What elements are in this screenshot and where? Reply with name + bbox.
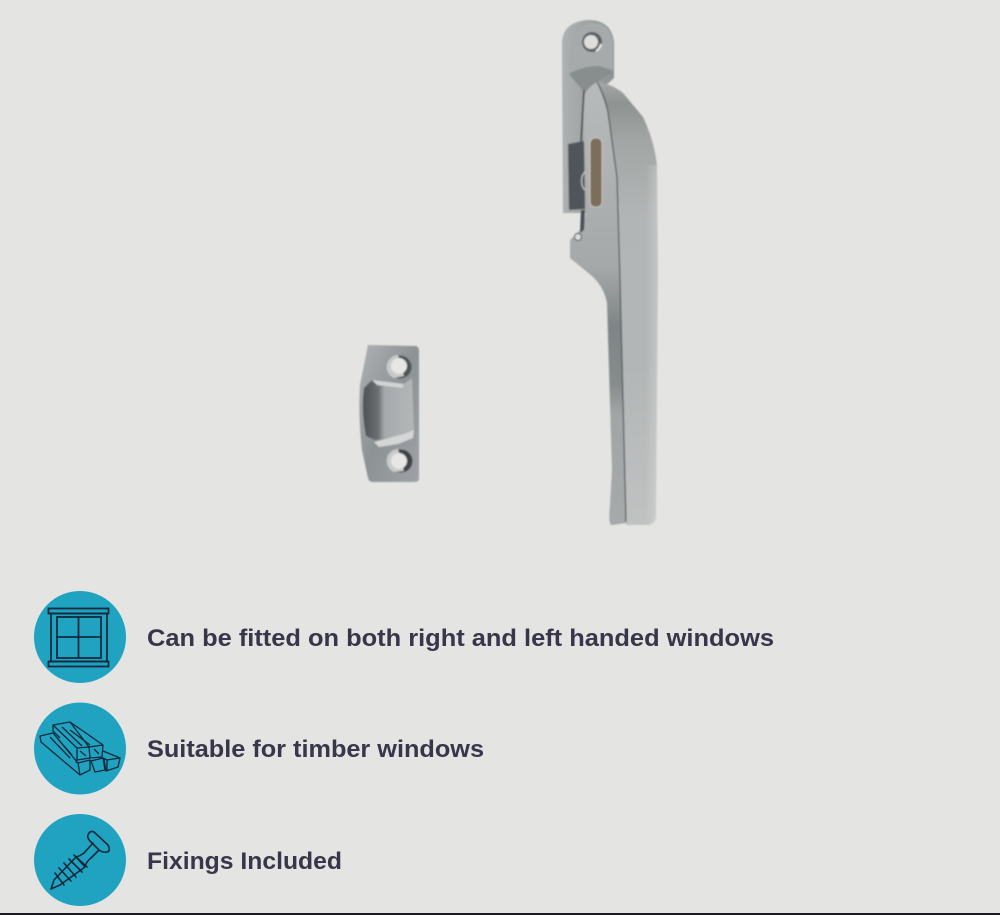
text: fixings: Fixings Included xyxy=(147,848,342,875)
slot xyxy=(590,138,602,207)
back plate xyxy=(562,20,614,213)
striker plate xyxy=(359,345,419,482)
handle side and lower body xyxy=(570,82,626,525)
icon: timber xyxy=(34,702,126,794)
edge line xyxy=(597,82,626,522)
top screw hole xyxy=(388,356,412,378)
screw hole xyxy=(582,32,602,52)
handle: window fastener xyxy=(562,20,658,525)
plate seam xyxy=(581,90,584,142)
plate ridge xyxy=(569,66,614,92)
catch pivot xyxy=(582,172,585,190)
bottom screw hole xyxy=(390,450,412,472)
bottom rule xyxy=(0,913,1000,915)
text: fitting: Can be fitted on both right and left handed windows xyxy=(147,625,774,652)
recess shading xyxy=(372,380,404,388)
recess highlight xyxy=(374,430,414,447)
face highlight xyxy=(617,165,658,525)
icon: window xyxy=(34,591,126,683)
icon: screw xyxy=(34,814,126,906)
catch pin xyxy=(580,210,585,233)
handle front face xyxy=(597,82,658,525)
catch block xyxy=(568,141,585,210)
plate top face xyxy=(569,23,613,74)
striker outline xyxy=(359,345,419,482)
striker recess xyxy=(363,378,414,440)
text: timber: Suitable for timber windows xyxy=(147,736,484,763)
